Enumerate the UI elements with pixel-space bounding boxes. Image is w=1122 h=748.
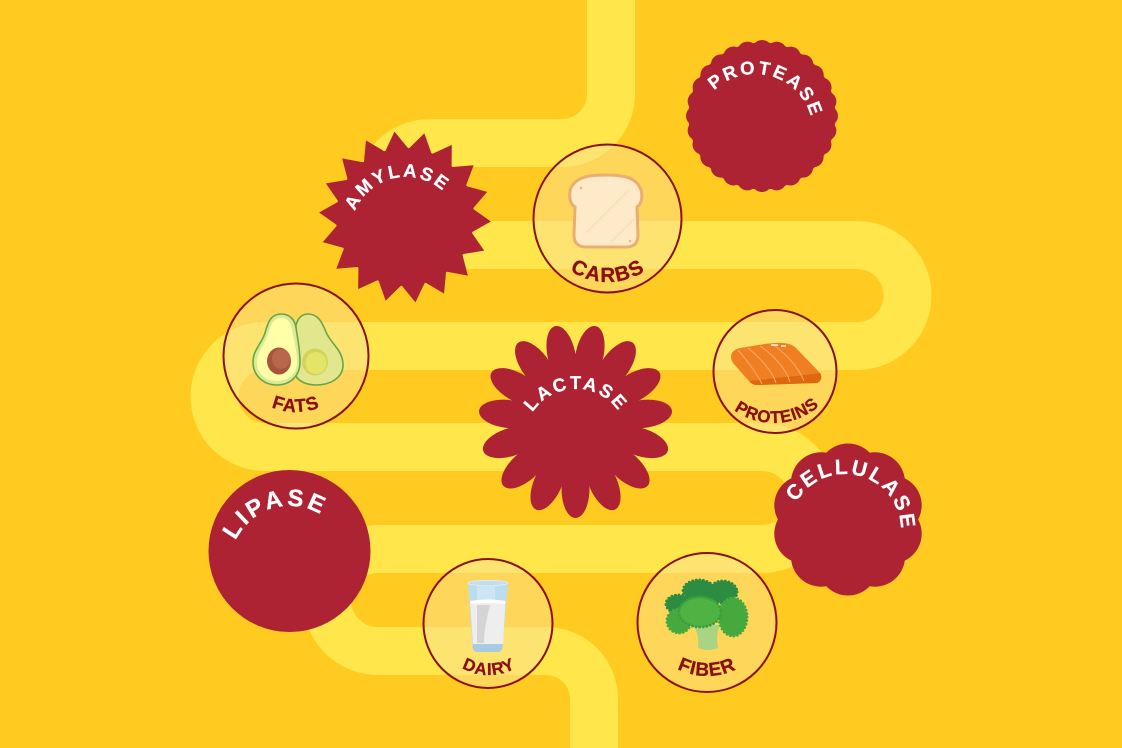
enzyme: cellulase: CELLULASE bbox=[787, 460, 916, 528]
food badge: proteins: PROTEINS bbox=[734, 398, 818, 424]
enzyme: cellulase bbox=[774, 444, 922, 596]
food badge: fats: FATS bbox=[272, 395, 318, 412]
enzyme: lipase: LIPASE bbox=[222, 489, 326, 540]
icon: avocado bbox=[253, 314, 343, 385]
food badge: fiber bbox=[636, 552, 778, 693]
digestive tract path bbox=[214, 0, 908, 748]
enzyme: protease bbox=[686, 40, 838, 192]
icon: bread slice bbox=[570, 175, 642, 247]
food badge: fiber: FIBER bbox=[678, 657, 736, 676]
food badge: proteins bbox=[712, 309, 838, 434]
enzyme: protease: PROTEASE bbox=[707, 61, 823, 116]
food badge: carbs bbox=[532, 144, 682, 294]
food badge: dairy bbox=[422, 558, 554, 689]
food badge: carbs: CARBS bbox=[572, 260, 643, 282]
enzyme: amylase: AMYLASE bbox=[346, 164, 450, 211]
food badge: dairy: DAIRY bbox=[462, 658, 512, 676]
icon: broccoli bbox=[666, 580, 747, 650]
enzyme: lipase bbox=[208, 470, 370, 632]
icon: salmon fillet bbox=[731, 343, 821, 385]
enzyme: lactase bbox=[479, 326, 672, 518]
food badge: fats bbox=[222, 282, 370, 430]
enzyme: amylase bbox=[319, 132, 491, 302]
enzyme: lactase: LACTASE bbox=[523, 376, 628, 412]
icon: glass of milk bbox=[468, 580, 508, 652]
